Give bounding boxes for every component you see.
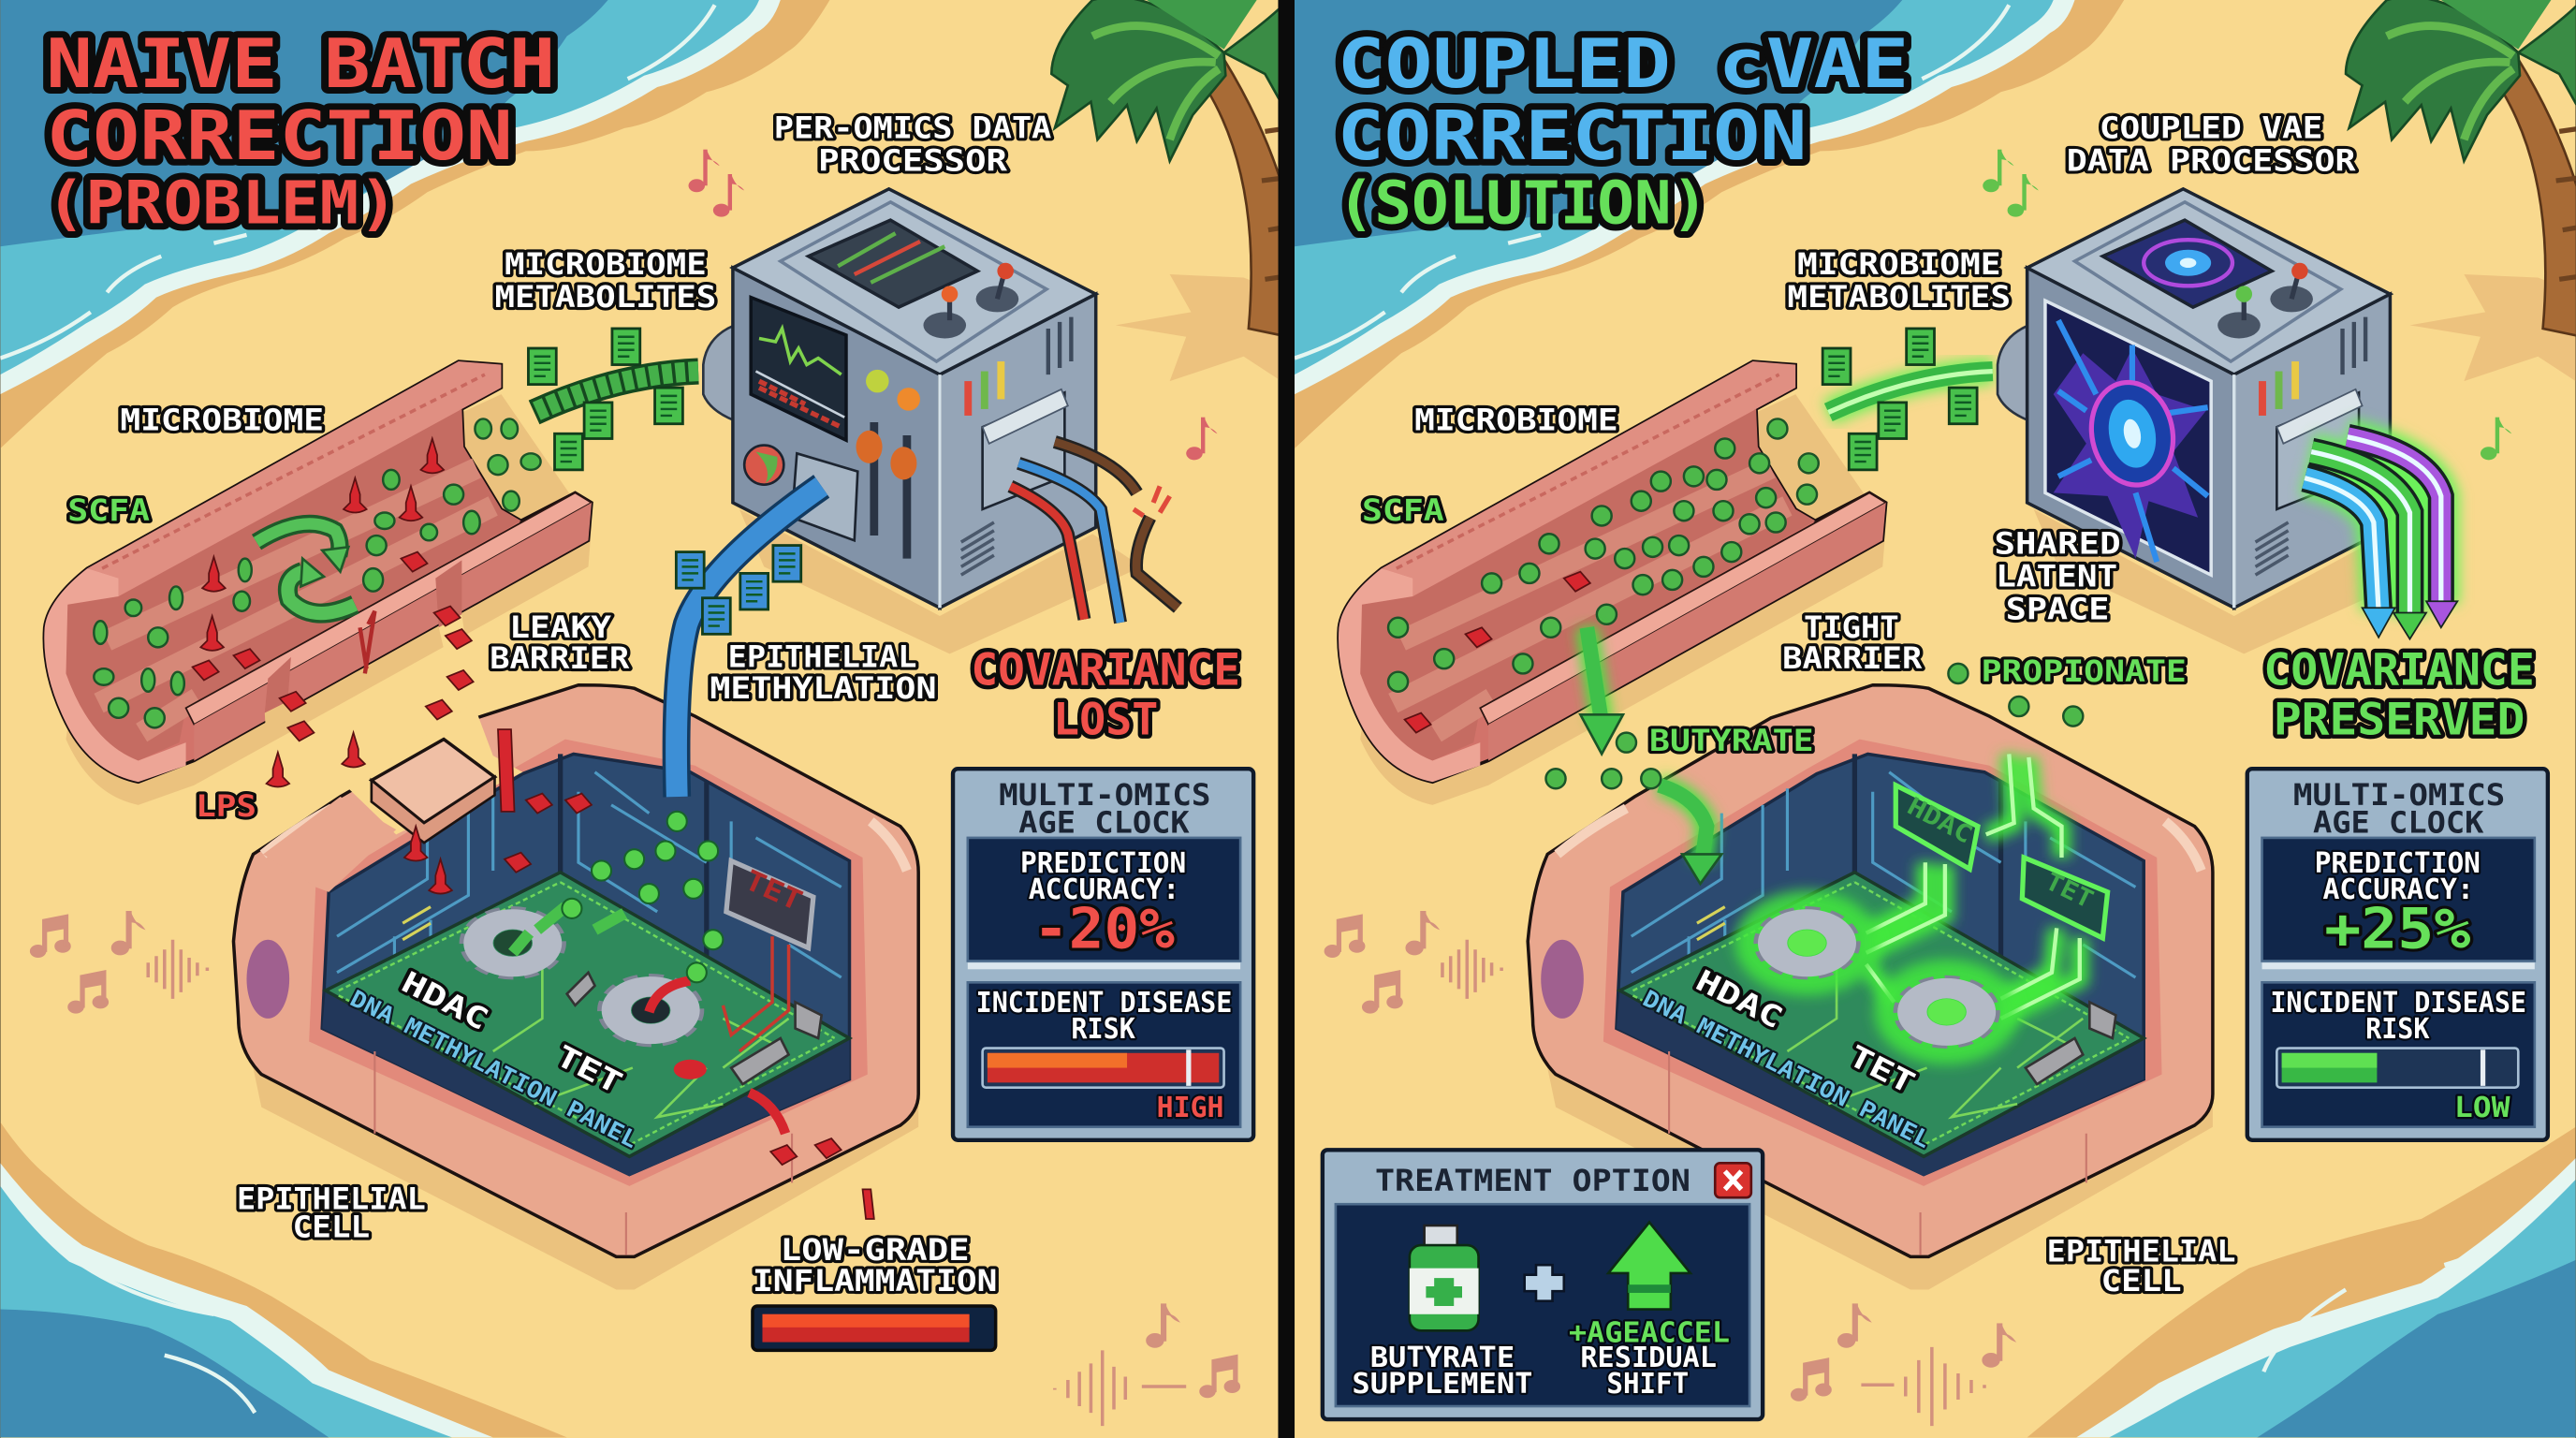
music notes and sound wave bottom right <box>1055 1304 1239 1426</box>
panel: treatment option: RESIDUAL <box>1580 1342 1717 1374</box>
music notes and sound wave bottom <box>1792 1304 2014 1426</box>
cell: epithelial cell with active enzymes <box>1528 685 2213 1289</box>
label: low-grade inflammation <box>753 1234 997 1299</box>
label: microbiome: MICROBIOME <box>120 404 324 438</box>
label: tight barrier: TIGHT <box>1804 611 1899 645</box>
label: per-omics data processor: PROCESSOR <box>818 144 1008 178</box>
label: epithelial cell <box>237 1182 426 1244</box>
tube: healthy gut lumen <box>1339 361 1886 805</box>
label: per-omics data processor: PER-OMICS DATA <box>774 111 1051 145</box>
lps red leak particles <box>267 606 874 1219</box>
title: CORRECTION <box>1338 96 1807 175</box>
panel: multi-omics age clock: MULTI-OMICS <box>999 779 1211 813</box>
label: microbiome metabolites <box>494 248 716 315</box>
label: microbiome metabolites <box>1787 248 2011 315</box>
title: (PROBLEM) <box>46 169 398 238</box>
gauge: disease risk low <box>2276 1049 2518 1088</box>
cables: coupled outputs <box>2305 437 2457 639</box>
panel: multi-omics age clock: +25% <box>2324 897 2470 961</box>
music notes and sound wave left <box>31 912 207 1013</box>
title: NAIVE BATCH <box>46 24 555 103</box>
panel: naive batch correction (problem) <box>0 0 1288 1438</box>
panel: coupled cvae correction (solution) <box>1295 0 2576 1438</box>
cell: epithelial cell with methylation panel <box>233 685 918 1289</box>
metabolite stream <box>528 329 698 470</box>
panel: multi-omics age clock: RISK <box>2365 1013 2430 1046</box>
gear: hdac <box>466 911 560 975</box>
label: propionate: PROPIONATE <box>1981 655 2187 689</box>
sand background <box>0 0 1278 1438</box>
label: per-omics data processor <box>774 111 1051 178</box>
music notes and sound wave left <box>1325 912 1501 1013</box>
label: hdac: HDAC <box>1690 964 1788 1035</box>
label: microbiome metabolites: MICROBIOME <box>1797 248 2001 282</box>
label: dna methylation panel: DNA METHYLATION PANEL <box>346 985 642 1153</box>
panel: multi-omics age clock: AGE CLOCK <box>2313 807 2483 841</box>
label: coupled vae data processor: COUPLED VAE <box>2100 111 2322 145</box>
label: low-grade inflammation: INFLAMMATION <box>753 1265 997 1299</box>
panel: multi-omics age clock: RISK <box>1071 1013 1135 1046</box>
tube: microbiome gut lumen <box>44 361 592 805</box>
label: hdac: HDAC <box>396 965 493 1037</box>
gear: tet active <box>1900 980 1993 1044</box>
panel: multi-omics age clock: INCIDENT DISEASE <box>2270 987 2526 1020</box>
palm tree <box>2346 0 2576 381</box>
panel: multi-omics age clock: PREDICTION <box>1020 847 1186 880</box>
processor: coupled vae data processor <box>1998 189 2437 653</box>
label: tight barrier: BARRIER <box>1782 642 1923 676</box>
panel: multi-omics age clock: PREDICTION <box>2315 847 2481 880</box>
label: low-grade inflammation: LOW-GRADE <box>781 1234 970 1268</box>
label: shared latent space: SHARED <box>1995 527 2121 561</box>
label: butyrate: BUTYRATE <box>1649 725 1814 758</box>
label: coupled vae data processor <box>2067 111 2357 178</box>
processor: per-omics data processor <box>703 189 1142 653</box>
callout: covariance preserved <box>2263 645 2535 745</box>
ocean bottom left <box>0 1122 567 1437</box>
ocean bottom right <box>2027 1127 2576 1437</box>
panel: treatment option: TREATMENT OPTION <box>1375 1165 1690 1198</box>
title: COUPLED cVAE <box>1338 24 1909 103</box>
label: epithelial cell: CELL <box>293 1211 370 1244</box>
cables: broken outputs <box>1010 442 1178 623</box>
panel: multi-omics age clock <box>953 769 1253 1140</box>
label: lps: LPS <box>196 790 256 824</box>
panel: multi-omics age clock: ACCURACY: <box>2322 873 2474 906</box>
callout: covariance preserved: PRESERVED <box>2274 694 2525 745</box>
sign: hdac: HDAC <box>1902 793 1977 850</box>
label: shared latent space: SPACE <box>2006 594 2109 627</box>
label: tight barrier <box>1782 611 1923 676</box>
screen: shared latent space <box>2045 301 2211 575</box>
gear: tet <box>604 978 697 1042</box>
panel: multi-omics age clock: INCIDENT DISEASE <box>976 987 1232 1020</box>
label: coupled vae data processor: DATA PROCESSOR <box>2067 144 2357 178</box>
callout: covariance lost: LOST <box>1053 694 1158 745</box>
callout: covariance preserved: COVARIANCE <box>2263 645 2535 697</box>
label: microbiome metabolites: METABOLITES <box>1787 281 2011 315</box>
ocean top left <box>1295 0 2124 448</box>
panel: multi-omics age clock: -20% <box>1033 897 1175 961</box>
label: epithelial cell: EPITHELIAL <box>237 1182 426 1216</box>
sign: tet <box>2022 858 2108 938</box>
label: scfa: SCFA <box>67 494 150 528</box>
icon: butyrate bottle <box>1410 1225 1479 1330</box>
label: tet: TET <box>550 1039 627 1101</box>
callout: covariance lost: COVARIANCE <box>971 645 1240 697</box>
sign: tet on wall: TET <box>739 864 807 918</box>
panel: treatment option: SHIFT <box>1606 1368 1689 1401</box>
sand background <box>1295 0 2576 1438</box>
label: microbiome metabolites: METABOLITES <box>494 281 716 315</box>
label: tet: TET <box>1843 1039 1920 1101</box>
metabolite stream <box>1822 329 1993 470</box>
label: shared latent space: LATENT <box>1996 560 2117 594</box>
panel: multi-omics age clock <box>2247 769 2548 1140</box>
panel: multi-omics age clock: ACCURACY: <box>1029 873 1179 906</box>
panel: multi-omics age clock: AGE CLOCK <box>1018 807 1190 841</box>
music notes top <box>1983 150 2511 460</box>
label: epithelial methylation: METHYLATION <box>710 672 936 706</box>
panel: treatment option: BUTYRATE <box>1370 1342 1515 1374</box>
label: microbiome: MICROBIOME <box>1414 404 1618 438</box>
panel: treatment option <box>1323 1150 1763 1419</box>
glow traces <box>1866 754 2080 1019</box>
label: microbiome metabolites: MICROBIOME <box>505 248 707 282</box>
panel: treatment option: SUPPLEMENT <box>1352 1368 1532 1401</box>
title: CORRECTION <box>46 96 513 175</box>
swirl arrows <box>256 523 355 613</box>
ocean top left <box>0 0 829 448</box>
label: epithelial methylation: EPITHELIAL <box>728 640 916 674</box>
music notes top <box>689 150 1218 460</box>
label: leaky barrier <box>490 611 630 676</box>
panel: multi-omics age clock: HIGH <box>1157 1092 1224 1124</box>
panel: treatment option: +AGEACCEL <box>1569 1317 1730 1350</box>
gauge: inflammation bar <box>753 1306 996 1350</box>
icon: plus <box>1525 1265 1564 1301</box>
label: scfa: SCFA <box>1362 494 1444 528</box>
label: leaky barrier: LEAKY <box>509 611 611 645</box>
label: leaky barrier: BARRIER <box>490 642 630 676</box>
title <box>1338 24 1909 238</box>
label: epithelial cell: CELL <box>2101 1265 2182 1299</box>
butyrate and propionate particles <box>1545 664 2083 788</box>
callout: covariance lost <box>971 645 1240 745</box>
icon: close button <box>1715 1163 1751 1197</box>
title: (SOLUTION) <box>1338 169 1708 238</box>
sign: tet: TET <box>2041 868 2098 915</box>
palm tree <box>1051 0 1288 381</box>
title <box>46 24 555 238</box>
label: epithelial cell: EPITHELIAL <box>2047 1236 2235 1269</box>
sign: tet on wall <box>726 860 813 947</box>
icon: up arrow <box>1608 1223 1690 1310</box>
butyrate uptake arrows <box>1580 627 1721 884</box>
label: epithelial methylation <box>710 640 936 706</box>
label: shared latent space <box>1995 527 2121 627</box>
panel: multi-omics age clock: MULTI-OMICS <box>2293 779 2505 813</box>
gear: hdac active <box>1761 911 1853 975</box>
methylation data stream <box>676 486 822 797</box>
label: epithelial cell <box>2047 1236 2235 1299</box>
sign: hdac <box>1895 785 1978 869</box>
label: dna methylation panel: DNA METHYLATION PANEL <box>1639 985 1935 1153</box>
gauge: disease risk high <box>983 1049 1224 1088</box>
panel: multi-omics age clock: LOW <box>2454 1092 2510 1124</box>
